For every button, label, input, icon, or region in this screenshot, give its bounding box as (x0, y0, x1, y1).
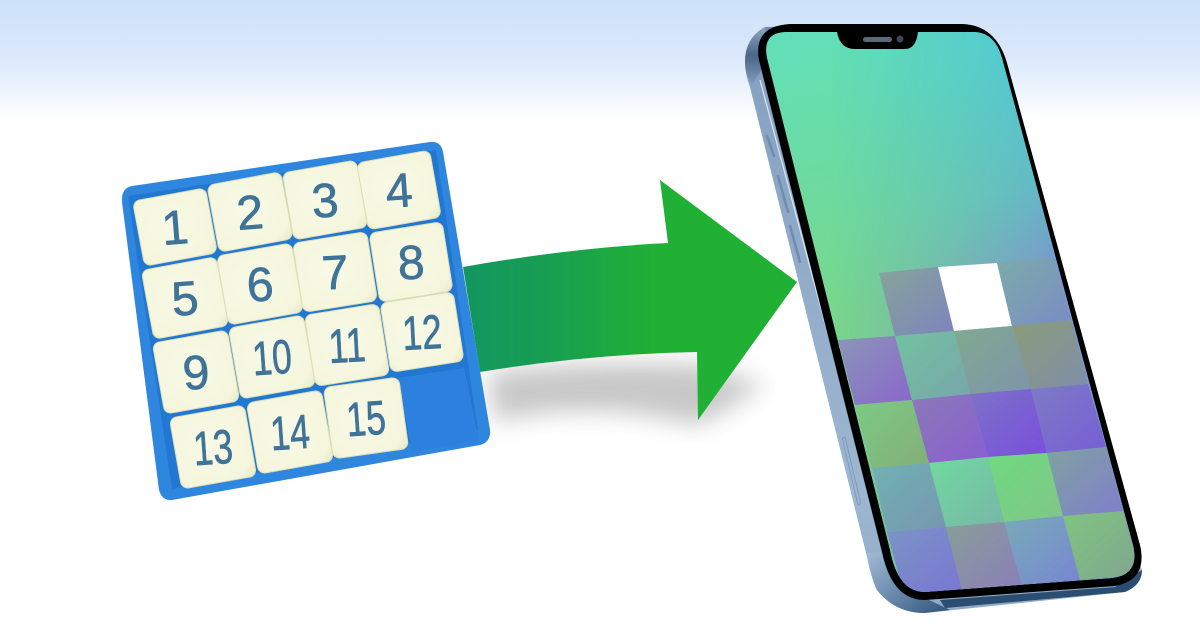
speaker (863, 37, 892, 42)
tray well: recessed floor (128, 150, 478, 489)
tile 11: 11 (327, 318, 367, 373)
arrow: curved green arrow (463, 180, 797, 420)
puzzle: 15 sliding tile tray (122, 142, 490, 500)
tile 2: 2 (235, 186, 266, 241)
front camera (896, 36, 904, 42)
screen gradient: right tone (856, 32, 1134, 592)
tile 15: 15 (344, 390, 388, 447)
screen gradient: left tone (766, 32, 1134, 592)
tile 4: 4 (384, 164, 414, 219)
volume down button (790, 226, 800, 262)
phone lower left corner (867, 552, 950, 613)
tile 8 (369, 222, 453, 302)
phone: smartphone with scrambled puzzle (745, 20, 1150, 613)
phone bottom edge (940, 570, 1142, 608)
tile 13 (169, 405, 257, 489)
phone side highlight (760, 80, 885, 548)
tile 12: 12 (401, 305, 443, 360)
background: sky gradient band (0, 0, 1200, 118)
tile 10 (228, 315, 316, 399)
tile 7: 7 (320, 246, 350, 301)
tile 3 (282, 160, 368, 240)
tile 6 (216, 243, 304, 325)
tile 5: 5 (170, 272, 201, 327)
tile 5 (141, 257, 229, 339)
screen: gradient display (766, 32, 1134, 592)
tile 9 (152, 330, 240, 414)
tray: blue frame (122, 142, 490, 500)
volume switch (767, 136, 774, 156)
phone top corner shading (745, 27, 770, 84)
tile 12 (380, 292, 464, 372)
tile 4 (357, 150, 441, 230)
puzzle grid: 19 colored squares and one empty white slot (838, 257, 1140, 595)
bezel: black screen border (758, 24, 1142, 600)
tile 11 (304, 304, 390, 386)
tile 1 (133, 188, 217, 266)
sim tray (842, 437, 860, 505)
tile 1: 1 (160, 201, 191, 256)
tile 9: 9 (181, 346, 211, 401)
phone body: metal frame (745, 24, 1142, 613)
tray well: bright empty corner (398, 368, 479, 452)
tile 6: 6 (245, 258, 275, 313)
tile 3: 3 (310, 174, 340, 229)
tile 7 (292, 232, 378, 312)
tile 8: 8 (396, 236, 426, 291)
arrow shadow (488, 364, 765, 425)
tile 14 (246, 390, 334, 474)
tile 14: 14 (268, 404, 312, 461)
tile 13: 13 (191, 419, 235, 476)
volume up button (778, 176, 788, 212)
tile 15 (323, 377, 409, 459)
tile 10: 10 (250, 329, 294, 386)
tile 2 (207, 172, 293, 252)
